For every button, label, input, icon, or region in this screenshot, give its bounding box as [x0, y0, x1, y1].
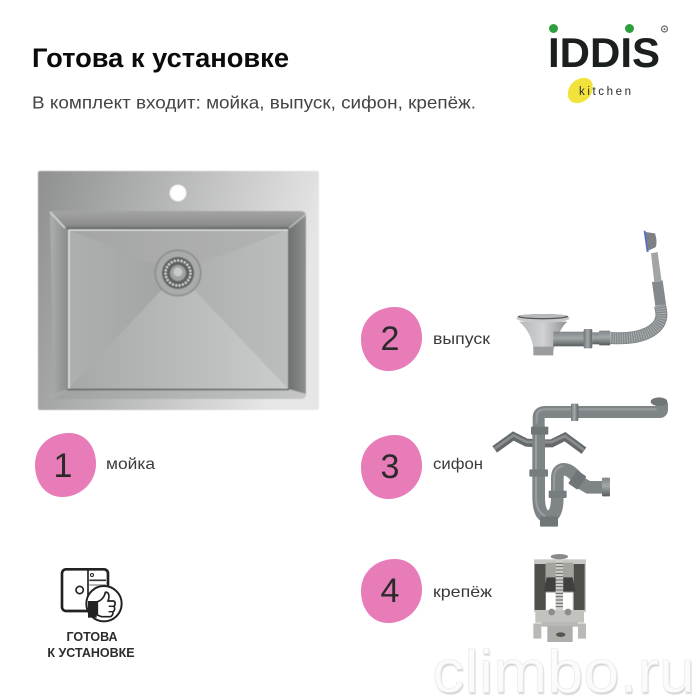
badge 4: крепёж: [361, 559, 492, 623]
drain strainer: [154, 250, 202, 296]
badge 3: сифон: 3: [381, 448, 399, 486]
badge 4: крепёж: крепёж: [433, 584, 492, 601]
vertical pipe and trap: [539, 427, 579, 517]
badge 1: мойка: [35, 433, 155, 497]
logo: IDDIS kitchen: [548, 24, 668, 103]
collars: [531, 427, 548, 435]
product: mounting clip: [533, 554, 586, 642]
title: Готова к установке: [32, 43, 289, 73]
badge 2: выпуск: выпуск: [433, 331, 491, 348]
product: drain outlet with overflow hose: [516, 231, 666, 355]
icon: ready to install: [62, 569, 122, 621]
badge 3: сифон: сифон: [433, 456, 483, 473]
side hose branches: [495, 436, 584, 451]
icon caption: ГОТОВА: [66, 630, 118, 644]
badge 4: крепёж: 4: [381, 572, 399, 610]
basin walls: [50, 211, 306, 399]
logo: IDDIS kitchen: IDDIS: [548, 29, 660, 76]
subtitle: kit contents: В комплект входит: мойка, выпуск, сифон, крепёж.: [32, 92, 476, 112]
icon caption: [47, 630, 135, 660]
badge 3: сифон: [361, 435, 483, 499]
tap hole: [170, 185, 186, 201]
badge 2: выпуск: 2: [381, 320, 399, 358]
basin floor: [67, 228, 289, 390]
icon caption: К УСТАНОВКЕ: [47, 646, 135, 660]
badge 2: выпуск: [361, 307, 491, 371]
badge 1: мойка: 1: [54, 447, 72, 485]
product: double siphon: [495, 397, 667, 527]
overflow arm: [539, 403, 662, 427]
badge 1: мойка: мойка: [106, 456, 155, 473]
panel: sink product photo: [38, 171, 319, 410]
logo: IDDIS kitchen: kitchen: [579, 86, 631, 98]
